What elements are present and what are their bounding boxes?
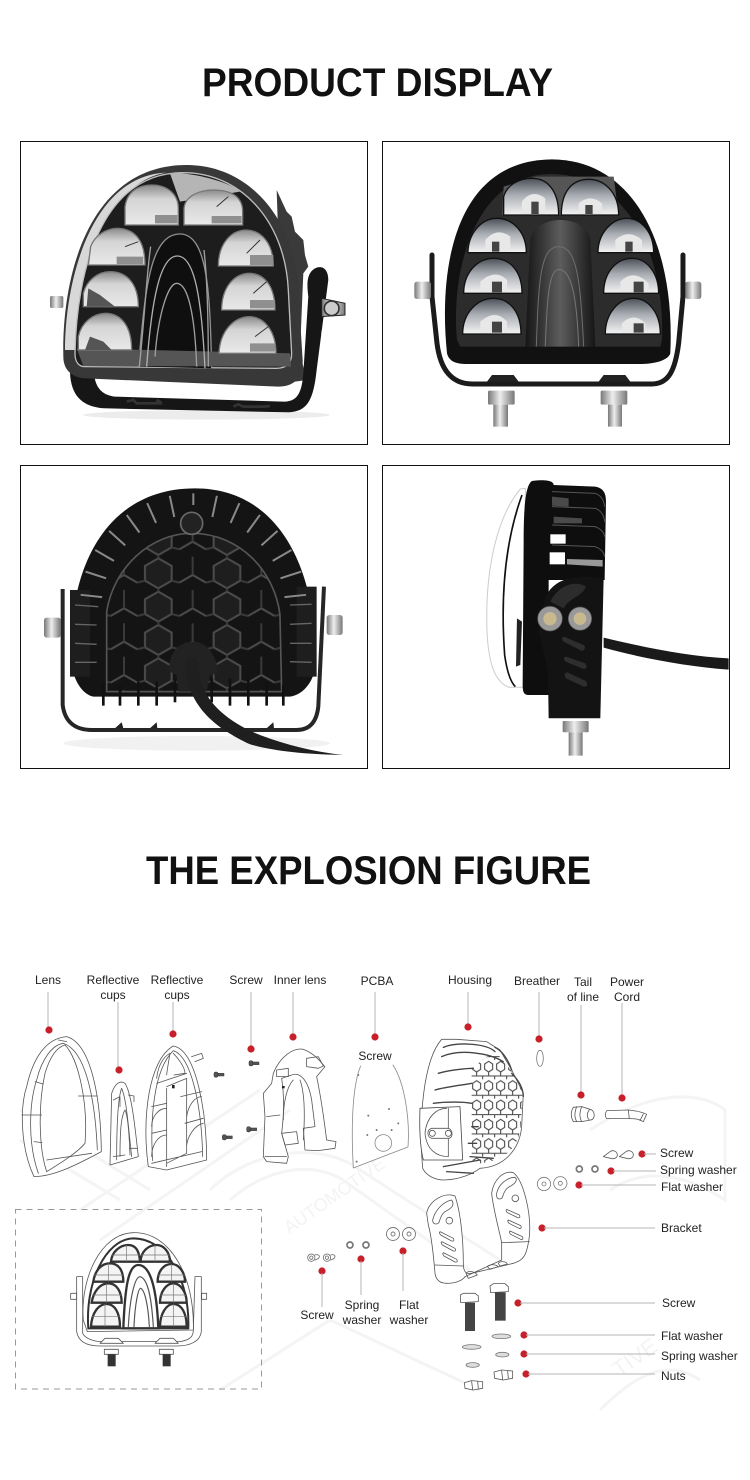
callout: flat washer right: [575, 1180, 723, 1194]
callout: spring washer right: Spring washer: [660, 1163, 737, 1177]
part: tail of line: [571, 1107, 594, 1122]
part: screws: [214, 1061, 259, 1140]
icon: lamp rear heat sink: [44, 488, 343, 755]
icon: assembled lamp line drawing: [71, 1233, 207, 1366]
callout: reflective cups 2: Reflective: [151, 973, 204, 987]
part: bracket: [427, 1172, 530, 1283]
dashed box: assembled lamp: [16, 1210, 369, 1389]
panel: front black view: [382, 142, 730, 444]
parts: right exploded row: [420, 1039, 647, 1191]
part: washers and nuts: [462, 1334, 513, 1390]
callout: screw top: Screw: [229, 973, 263, 987]
callout: spring washer bottom: [342, 1255, 381, 1327]
icon: lamp with clear lens: [50, 165, 345, 420]
callout: spring washer bottom: washer: [342, 1313, 381, 1327]
part: breather ring: [537, 1050, 543, 1066]
part: reflective cups small: [110, 1082, 138, 1165]
callout: breather: Breather: [514, 974, 560, 988]
callout: bracket: Bracket: [661, 1221, 702, 1235]
callout: power cord: Cord: [614, 990, 640, 1004]
callout: spring washer bottom: Spring: [345, 1298, 379, 1312]
callout: reflective cups 1: Reflective: [87, 973, 140, 987]
callout: reflective cups 1: [87, 973, 140, 1074]
callout: flat washer bottom: [389, 1247, 428, 1327]
callout: screw lower: [514, 1296, 696, 1310]
title: the explosion figure: THE EXPLOSION FIGURE: [146, 849, 591, 893]
callout: reflective cups 2: [151, 973, 204, 1038]
part: spring washers right: [576, 1166, 598, 1172]
callout: tail of line: [567, 975, 599, 1099]
callout: lens: Lens: [35, 973, 61, 987]
callout: screw top: [229, 973, 263, 1053]
callout: spring washer right: [607, 1163, 737, 1177]
callout: housing: [448, 973, 492, 1031]
callout: reflective cups 1: cups: [100, 988, 126, 1002]
part: bolts: [460, 1284, 508, 1331]
callout: nuts: [522, 1369, 686, 1383]
panel: side view: [382, 466, 730, 768]
label: screw on PCBA: Screw: [358, 1049, 392, 1063]
icon: lamp side profile: [487, 480, 729, 756]
callout: lens: [35, 973, 61, 1034]
callout: spring washer lower: Spring washer: [661, 1349, 738, 1363]
watermark: TIVE: [608, 1333, 662, 1382]
callout: tail of line: Tail: [574, 975, 592, 989]
callout: power cord: [610, 975, 644, 1102]
callout: screw right: Screw: [660, 1146, 694, 1160]
part: PCBA plate: [352, 1065, 408, 1168]
callout: screw lower: Screw: [662, 1296, 696, 1310]
callout: screw bottom: [300, 1267, 334, 1322]
callout: inner lens: [274, 973, 326, 1041]
panel: rear view: [20, 466, 368, 768]
callout: spring washer lower: [520, 1349, 738, 1363]
callout: tail of line: of line: [567, 990, 599, 1004]
lens cups: [78, 185, 276, 353]
part: housing: [420, 1039, 523, 1180]
callout: inner lens: Inner lens: [274, 973, 326, 987]
part: lens: [22, 1037, 101, 1177]
part: reflective cups large: [146, 1046, 207, 1170]
title: product display: PRODUCT DISPLAY: [202, 61, 553, 105]
part: flat washers bottom: [386, 1228, 416, 1240]
parts: left exploded row: [22, 1037, 408, 1177]
callout: flat washer bottom: Flat: [399, 1298, 420, 1312]
callout: flat washer lower: [520, 1329, 723, 1343]
callout: breather: [514, 974, 560, 1043]
callout: screw bottom: Screw: [300, 1308, 334, 1322]
lamp cups: [463, 178, 660, 334]
panel: front lens view: [20, 142, 368, 444]
part: flat washers right: [537, 1177, 567, 1191]
callout: flat washer right: Flat washer: [661, 1180, 723, 1194]
watermark: [20, 1090, 725, 1410]
parts: bracket and hardware: [427, 1172, 530, 1390]
part: power cord: [605, 1110, 647, 1122]
part: inner lens: [263, 1049, 336, 1163]
watermark: AUTOMOTIVE: [280, 1153, 389, 1238]
callout: bracket: [538, 1221, 702, 1235]
part: spring washers bottom: [347, 1242, 369, 1248]
callout: screw right: [638, 1146, 694, 1160]
callout: PCBA: PCBA: [361, 974, 393, 988]
callout: power cord: Power: [610, 975, 644, 989]
callout: PCBA: [361, 974, 393, 1041]
icon: lamp front with bracket: [414, 159, 701, 427]
callout: flat washer lower: Flat washer: [661, 1329, 723, 1343]
callout: nuts: Nuts: [661, 1369, 686, 1383]
part: screw set right: [603, 1151, 633, 1159]
callout: reflective cups 2: cups: [164, 988, 190, 1002]
callout: housing: Housing: [448, 973, 492, 987]
part: screws bottom: [308, 1254, 335, 1261]
callout: flat washer bottom: washer: [389, 1313, 428, 1327]
